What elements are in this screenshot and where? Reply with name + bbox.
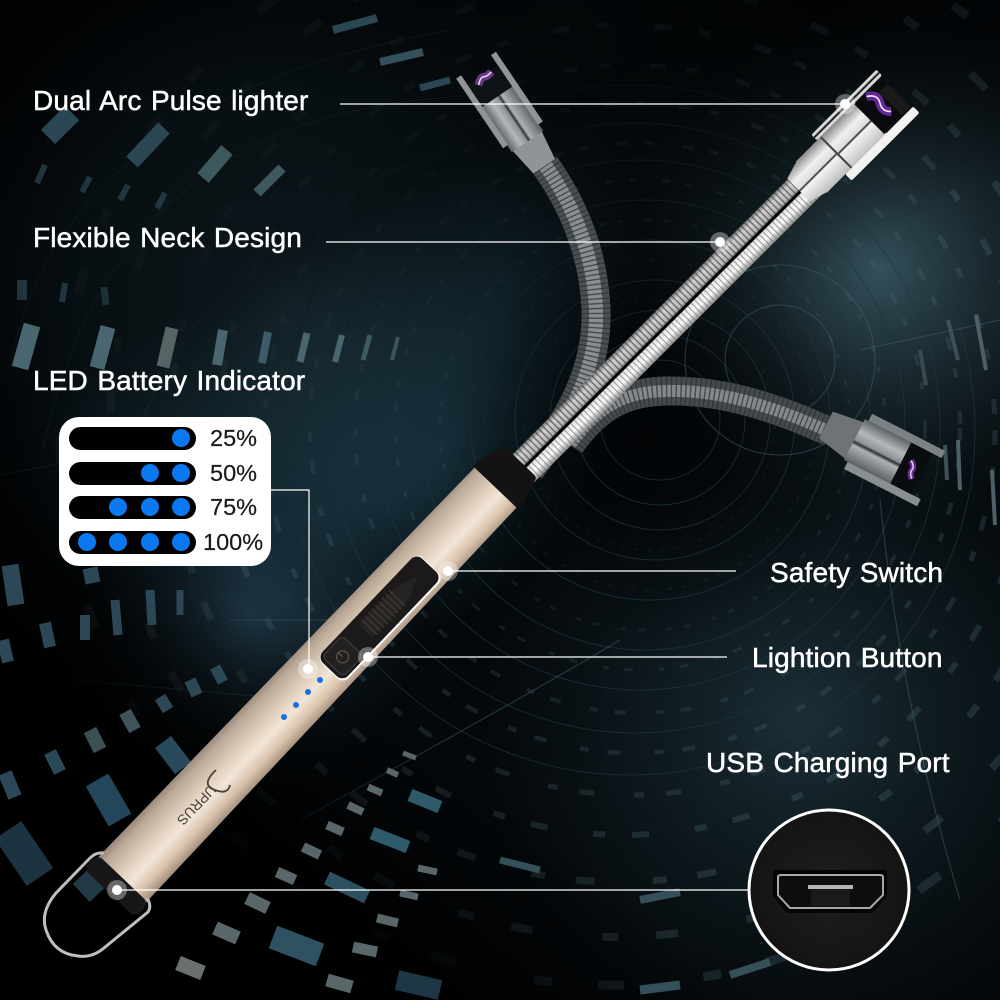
flexible neck: upper left position	[530, 165, 596, 470]
electric arc	[904, 461, 919, 479]
neck collar	[473, 440, 543, 509]
end cap	[83, 854, 149, 918]
bright bars: lower left	[3, 565, 223, 895]
label: USB Charging Port: USB Charging Port	[706, 747, 950, 778]
key ring loop	[44, 853, 150, 956]
row: 75%: 75%	[210, 494, 257, 520]
electric arc	[866, 92, 891, 116]
label: Lightion Button: Lightion Button	[752, 642, 943, 673]
brand mark	[174, 770, 230, 828]
row: 100%: 100%	[203, 529, 263, 555]
lighter head: right position	[812, 397, 945, 506]
row: 25%: 25%	[210, 425, 257, 451]
flexible neck: straight position	[508, 169, 823, 484]
lighting button	[322, 636, 363, 677]
row: 50%	[69, 460, 257, 486]
label: Dual Arc Pulse lighter: Dual Arc Pulse lighter	[33, 85, 308, 116]
lighter head: silver main	[777, 70, 920, 212]
callout dots	[107, 94, 855, 900]
lighter body	[83, 437, 546, 918]
row: 50%: 50%	[210, 460, 257, 486]
USB port callout	[749, 810, 909, 970]
row: 100%	[69, 529, 263, 555]
LED indicator dots	[281, 677, 323, 720]
safety switch panel	[317, 552, 444, 684]
electric arc	[476, 71, 494, 85]
lighter head: upper left position	[456, 52, 564, 180]
label: Safety Switch: Safety Switch	[770, 557, 943, 588]
bright bars: left row	[20, 325, 398, 368]
bright bars: upper left	[22, 18, 450, 305]
icon: micro USB port	[773, 870, 887, 913]
row: 75%	[69, 494, 257, 520]
flexible neck: right position	[570, 391, 830, 445]
label: LED Battery Indicator: LED Battery Indicator	[33, 365, 305, 396]
label: Flexible Neck Design: Flexible Neck Design	[33, 222, 302, 253]
LED battery panel	[59, 417, 271, 566]
bright bars: right	[920, 315, 995, 525]
row: 25%	[69, 425, 257, 451]
leader lines	[117, 104, 845, 890]
brand mark: UPRUS	[174, 782, 219, 828]
bright bars: bottom	[178, 753, 770, 990]
